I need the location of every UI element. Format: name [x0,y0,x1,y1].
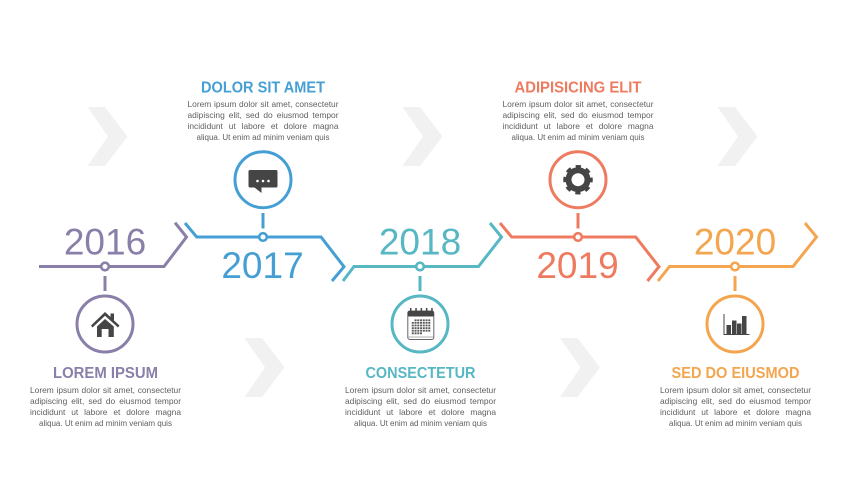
heading: adipisicing elit: ADIPISICING ELIT [514,79,642,96]
text block: dolor sit amet: adipiscing elit, sed do eiusmod tempor [188,110,338,120]
timeline segment 2018 [343,223,502,291]
text block: consectetur: adipiscing elit, sed do eiusmod tempor [345,396,496,406]
year 2016: 2016 [64,222,146,263]
year 2019: 2019 [536,245,619,286]
text block: adipisicing elit [502,98,654,144]
text block: adipisicing elit: incididunt ut labore et dolore magna [502,121,654,131]
timeline segment 2019 [500,213,659,281]
text block: consectetur: aliqua. Ut enim ad minim veniam quis [354,419,487,428]
timeline segment 2016 [39,223,186,291]
text block: dolor sit amet: Lorem ipsum dolor sit amet, consectetur [188,98,338,108]
heading: dolor sit amet: DOLOR SIT AMET [201,79,325,96]
heading: lorem ipsum: LOREM IPSUM [53,365,158,382]
text block: lorem ipsum: aliqua. Ut enim ad minim veniam quis [39,419,172,428]
icon circle: house [77,296,133,352]
timeline segment 2020 [658,223,816,291]
text block: sed do eiusmod [660,384,811,430]
heading: consectetur: CONSECTETUR [366,365,476,382]
panel: 2016 lorem ipsum [30,222,186,430]
timeline segment 2017 [185,213,344,281]
text block: lorem ipsum: adipiscing elit, sed do eiusmod tempor [30,396,181,406]
text block: consectetur: Lorem ipsum dolor sit amet, consectetur [345,384,496,394]
icon circle: speech bubble [235,152,291,208]
text block: lorem ipsum: incididunt ut labore et dolore magna [30,407,181,417]
text block: dolor sit amet: aliqua. Ut enim ad minim veniam quis [197,133,329,142]
icon circle: gear [550,152,606,208]
background chevron arrows [88,107,758,397]
text block: dolor sit amet: incididunt ut labore et dolore magna [188,121,338,131]
panel: 2019 adipisicing elit [500,79,659,286]
text block: consectetur [345,384,496,430]
year 2018: 2018 [379,222,461,263]
text block: adipisicing elit: adipiscing elit, sed do eiusmod tempor [502,110,654,120]
text block: sed do eiusmod: Lorem ipsum dolor sit amet, consectetur [660,384,811,394]
text block: dolor sit amet [188,98,338,144]
text block: lorem ipsum [30,384,181,430]
panel: 2020 sed do eiusmod [658,222,816,430]
text block: consectetur: incididunt ut labore et dolore magna [345,407,496,417]
text block: sed do eiusmod: aliqua. Ut enim ad minim veniam quis [669,419,802,428]
text block: adipisicing elit: aliqua. Ut enim ad minim veniam quis [512,133,644,142]
text block: lorem ipsum: Lorem ipsum dolor sit amet, consectetur [30,384,181,394]
panel: 2017 dolor sit amet [185,79,344,286]
panel: 2018 consectetur [343,222,502,430]
text block: adipisicing elit: Lorem ipsum dolor sit amet, consectetur [502,98,654,108]
heading: sed do eiusmod: SED DO EIUSMOD [672,365,800,382]
year 2020: 2020 [694,222,776,263]
icon circle: calendar [392,296,448,352]
icon circle: bar chart [707,296,763,352]
text block: sed do eiusmod: incididunt ut labore et dolore magna [660,407,811,417]
year 2017: 2017 [221,245,304,286]
text block: sed do eiusmod: adipiscing elit, sed do eiusmod tempor [660,396,811,406]
